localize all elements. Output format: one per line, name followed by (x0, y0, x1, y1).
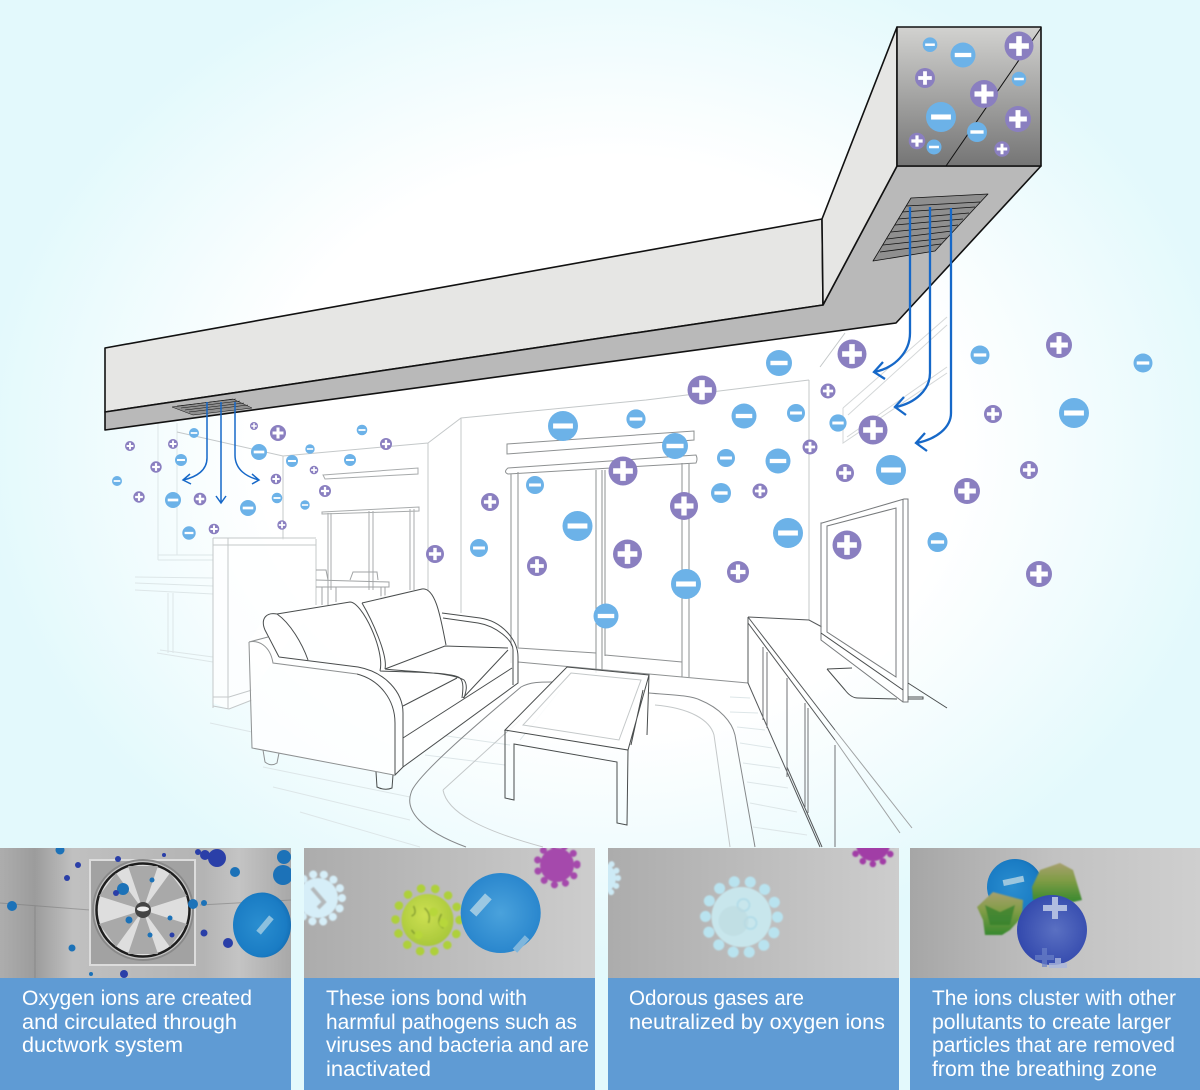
blue caption box (304, 978, 595, 1090)
panel: pathogens (294, 845, 595, 1090)
rug (410, 682, 807, 847)
riser side face (822, 27, 897, 305)
sofa rear leg (376, 772, 393, 789)
small grille (172, 399, 252, 415)
arrows: left vent airflow (183, 402, 259, 503)
image: ion bonding with virus (294, 845, 595, 978)
ions in the room (426, 332, 1152, 628)
caption: These ions bond with (326, 987, 527, 1010)
caption: neutralized by oxygen ions (629, 1011, 885, 1034)
right wall window (843, 317, 947, 443)
caption: viruses and bacteria and are (326, 1034, 589, 1057)
coffee table (505, 667, 649, 825)
caption: from the breathing zone (932, 1058, 1157, 1081)
caption: The ions cluster with other (932, 987, 1176, 1010)
blue caption box (608, 978, 899, 1090)
room line drawing (135, 317, 947, 847)
blue caption box (0, 978, 291, 1090)
caption: ductwork system (22, 1034, 183, 1057)
caption: particles that are removed (932, 1034, 1175, 1057)
tv (821, 499, 947, 708)
caption: harmful pathogens such as (326, 1011, 577, 1034)
duct cut face (897, 27, 1041, 166)
panel: clustering (910, 848, 1200, 1090)
image: fan with ions (0, 846, 293, 978)
arrows: right vent airflow (874, 207, 951, 451)
panel: odorous gases (608, 848, 899, 1090)
kitchen and back wall lines (135, 333, 845, 847)
panel: ion generation (0, 846, 293, 1090)
caption: Oxygen ions are created (22, 987, 252, 1010)
blue caption box (910, 978, 1200, 1090)
tv stand (748, 617, 912, 847)
caption: pollutants to create larger (932, 1011, 1171, 1034)
image: ion cluster (910, 848, 1200, 978)
caption: and circulated through (22, 1011, 237, 1034)
ions near left vent (112, 422, 392, 540)
rear window and dining table (316, 468, 419, 605)
caption: inactivated (326, 1058, 431, 1081)
duct underside (105, 166, 1041, 430)
counter block (213, 538, 316, 709)
duct (105, 27, 1041, 430)
ions inside duct (909, 32, 1034, 157)
duct long side face (105, 219, 823, 412)
image: neutralized virus (608, 848, 899, 978)
caption: Odorous gases are (629, 987, 804, 1010)
sofa (249, 589, 518, 789)
large grille (873, 194, 988, 261)
patio door (506, 431, 748, 683)
